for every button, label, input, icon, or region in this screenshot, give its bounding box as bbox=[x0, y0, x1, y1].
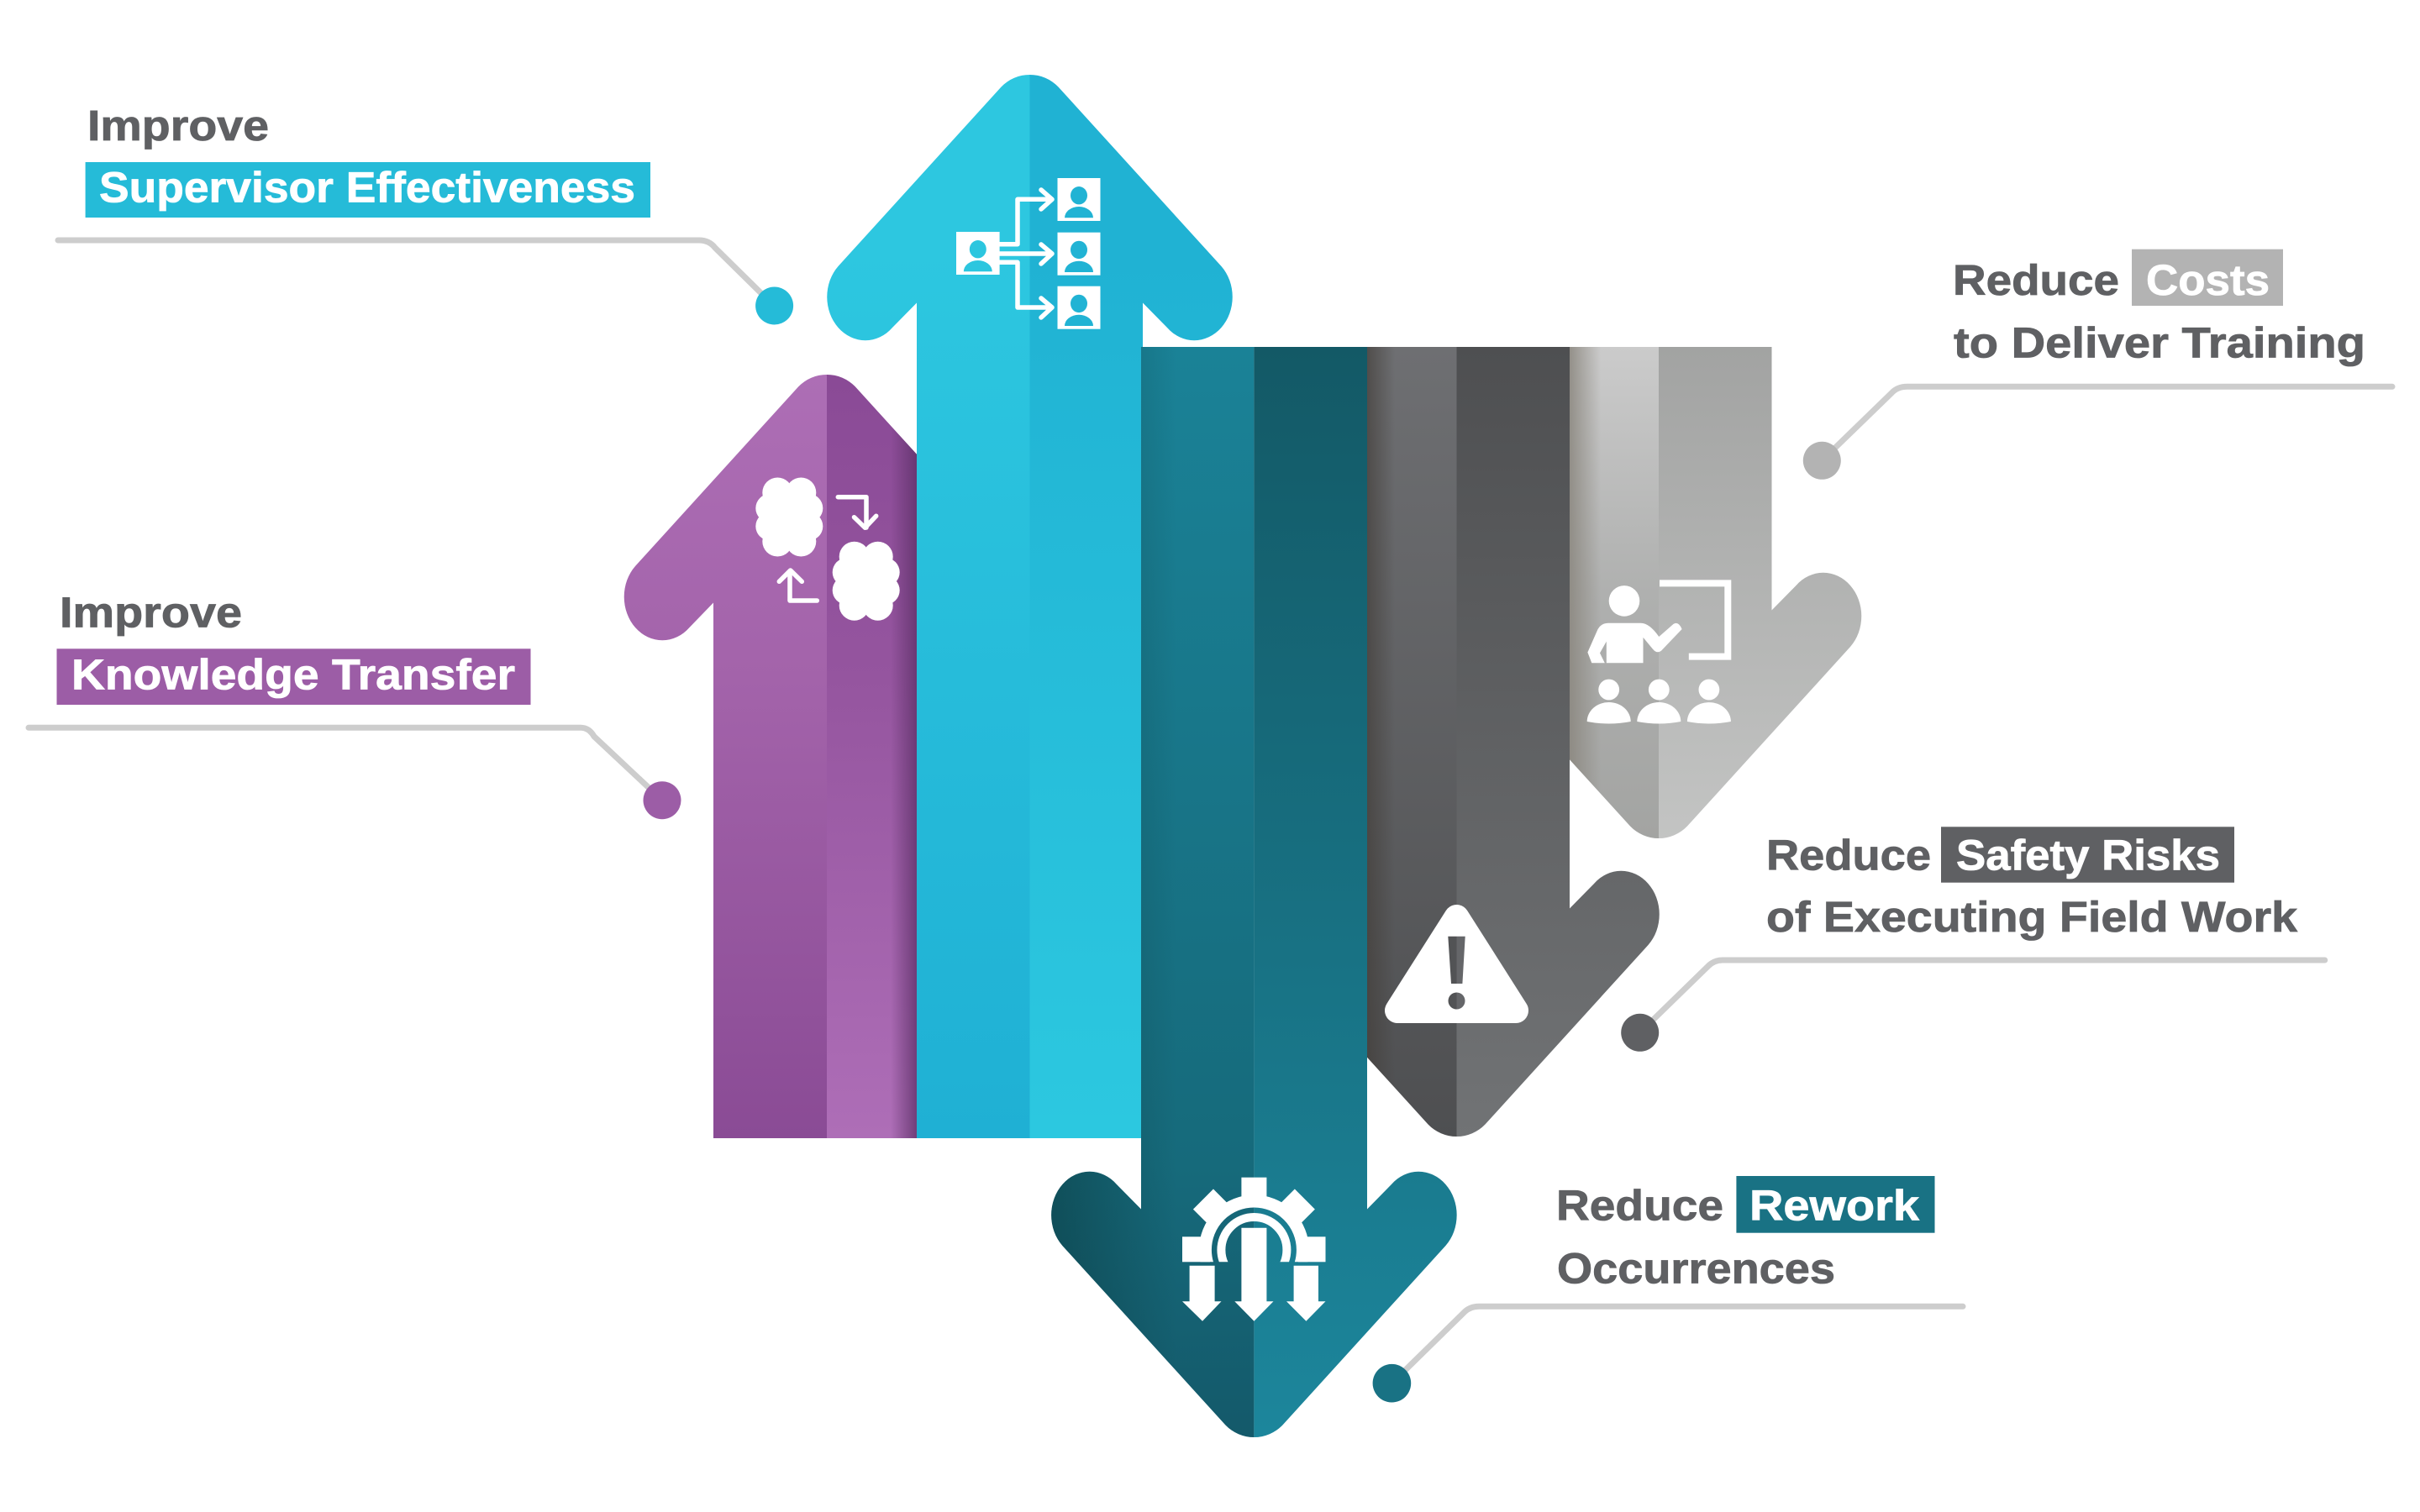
text: to deliver training: to Deliver Training bbox=[1954, 319, 2365, 367]
text: reduce: Reduce bbox=[1953, 256, 2119, 304]
arrow: light grey, reduce costs bbox=[1570, 336, 1869, 848]
icon: trainer and class bbox=[1587, 583, 1731, 724]
label: improve supervisor effectiveness bbox=[58, 102, 793, 324]
icon: gear with falling arrows bbox=[1182, 1178, 1326, 1321]
label: reduce safety risks of executing field work bbox=[1621, 827, 2325, 1052]
highlighted term: supervisor effectiveness: Supervisor Effectiveness bbox=[99, 164, 635, 212]
label: improve knowledge transfer bbox=[29, 588, 681, 819]
arrow: purple, improve knowledge transfer bbox=[622, 370, 917, 1138]
icon: supervisor to team bbox=[956, 178, 1101, 329]
icon: exchanging brains bbox=[755, 477, 900, 621]
heading: improve: Improve bbox=[60, 588, 242, 637]
highlighted term: rework: Rework bbox=[1749, 1181, 1920, 1230]
text: occurrences: Occurrences bbox=[1557, 1245, 1835, 1293]
highlighted term: knowledge transfer: Knowledge Transfer bbox=[71, 650, 515, 699]
highlighted term: safety risks: Safety Risks bbox=[1956, 832, 2220, 879]
label: reduce costs to deliver training bbox=[1803, 249, 2392, 480]
text: reduce: Reduce bbox=[1556, 1181, 1723, 1230]
heading: improve: Improve bbox=[87, 102, 269, 150]
highlighted term: costs: Costs bbox=[2146, 256, 2270, 304]
arrow: cyan, improve supervisor effectiveness bbox=[823, 67, 1235, 1138]
text: reduce: Reduce bbox=[1766, 832, 1931, 879]
highlighted term: costs bbox=[2132, 249, 2283, 306]
label: reduce rework occurrences bbox=[1373, 1176, 1963, 1402]
icon: warning triangle bbox=[1397, 917, 1516, 1011]
text: of executing field work: of Executing Field Work bbox=[1766, 893, 2298, 941]
arrow: dark grey, reduce safety risks bbox=[1367, 336, 1667, 1147]
arrow: teal, reduce rework bbox=[1046, 347, 1464, 1439]
highlighted term: rework bbox=[1736, 1176, 1934, 1233]
